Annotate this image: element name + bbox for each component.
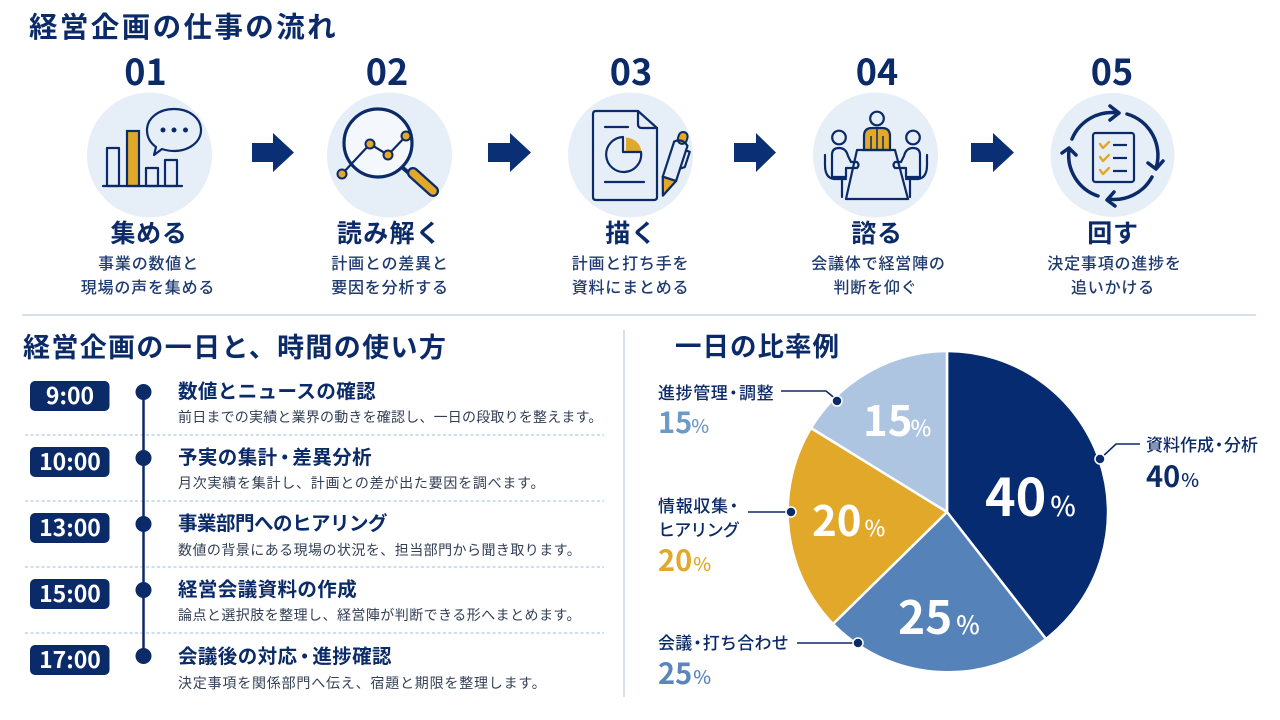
value 40%: 40% (985, 456, 1076, 531)
step description (1047, 250, 1182, 298)
step number 02: 02 (366, 44, 408, 96)
step number 03: 03 (610, 44, 652, 96)
callout: documents and analysis 40% (1095, 431, 1258, 496)
slice 40% (947, 351, 1108, 639)
row 9:00: 数値とニュースの確認 (178, 375, 376, 404)
callout: progress management 15%: 15% (658, 400, 709, 442)
arrow 2 (488, 133, 531, 172)
row 10:00 (30, 441, 545, 493)
step heading: 諮る (851, 214, 903, 250)
step description: 計画と打ち手を (572, 250, 689, 274)
arrow 1 (252, 133, 294, 172)
callout: information gathering 20%: ヒアリング (658, 516, 740, 541)
step description: 事業の数値と (98, 250, 199, 274)
row 15:00: 経営会議資料の作成 (178, 573, 357, 602)
row 17:00: 決定事項を関係部門へ伝え、宿題と期限を整理します。 (178, 673, 547, 693)
row 13:00: 事業部門へのヒアリング (178, 507, 388, 536)
callout: progress management 15% (658, 379, 842, 442)
step 02: analyze (327, 44, 452, 298)
icon: document and pen (568, 92, 695, 218)
callout: information gathering 20% (658, 492, 796, 580)
icon: magnifier and line chart (327, 92, 452, 218)
step description (81, 250, 215, 298)
step 01: collect (81, 44, 215, 298)
row 13:00: 数値の背景にある現場の状況を、担当部門から聞き取ります。 (178, 540, 581, 560)
row 17:00: 会議後の対応・進捗確認 (178, 640, 392, 669)
step description: 要因を分析する (331, 274, 449, 298)
title: 経営企画の仕事の流れ (29, 5, 338, 46)
step heading: 集める (110, 214, 188, 250)
step 03: draw (568, 44, 695, 298)
icon: meeting table with people (813, 92, 938, 218)
section heading: daily ratio: 一日の比率例 (675, 325, 840, 364)
slice 15% (811, 351, 947, 512)
icon: bar chart and speech bubble (87, 92, 212, 218)
row 10:00: 月次実績を集計し、計画との差が出た要因を調べます。 (178, 473, 545, 493)
step description: 会議体で経営陣の (811, 250, 946, 274)
step description: 決定事項の進捗を (1047, 250, 1182, 274)
callout: meetings 25%: 25% (658, 651, 711, 693)
step description: 追いかける (1071, 274, 1155, 298)
step description: 現場の声を集める (81, 274, 215, 298)
callout: meetings 25%: 会議・打ち合わせ (658, 629, 789, 654)
step description: 判断を仰ぐ (833, 274, 918, 298)
callout: meetings 25% (658, 629, 863, 693)
step number 05: 05 (1091, 44, 1133, 96)
step number 04: 04 (856, 44, 898, 96)
row 17:00 (30, 640, 547, 693)
arrow 3 (734, 133, 776, 172)
step description (811, 250, 946, 298)
section heading: daily schedule: 経営企画の一日と、時間の使い方 (23, 326, 447, 365)
step description: 資料にまとめる (572, 274, 689, 298)
callout: documents and analysis 40%: 資料作成・分析 (1146, 431, 1258, 456)
row 10:00: 予実の集計・差異分析 (178, 441, 372, 470)
step heading: 描く (605, 214, 657, 250)
row 15:00: 15:00 (39, 575, 101, 609)
step description (331, 250, 449, 298)
value 20%: 20% (812, 488, 885, 549)
step 05: follow up (1047, 44, 1182, 298)
row 9:00: 前日までの実績と業界の動きを確認し、一日の段取りを整えます。 (178, 407, 603, 427)
step number 01: 01 (124, 44, 167, 96)
step description: 計画との差異と (331, 250, 449, 274)
row 9:00 (30, 375, 603, 427)
row 13:00: 13:00 (39, 509, 101, 543)
step description (572, 250, 689, 298)
step heading: 回す (1087, 214, 1139, 250)
arrow 4 (971, 133, 1014, 172)
callout: progress management 15%: 進捗管理・調整 (658, 379, 774, 404)
row 13:00 (30, 507, 581, 560)
timeline (30, 375, 603, 693)
slice 25% (833, 512, 1046, 672)
value 15%: 15% (863, 388, 931, 449)
row 15:00: 論点と選択肢を整理し、経営陣が判断できる形へまとめます。 (178, 605, 581, 625)
callout: documents and analysis 40%: 40% (1146, 454, 1199, 496)
row 9:00: 9:00 (46, 377, 94, 411)
callout: information gathering 20%: 20% (658, 538, 711, 580)
step heading: 読み解く (337, 214, 442, 250)
slice 20% (788, 428, 947, 624)
value 25%: 25% (898, 582, 980, 648)
row 10:00: 10:00 (39, 443, 101, 477)
row 17:00: 17:00 (39, 641, 101, 675)
icon: cycle arrows and checklist (1050, 93, 1174, 217)
callout: information gathering 20%: 情報収集・ (658, 492, 743, 517)
pie chart (788, 351, 1108, 672)
step 04: consult (811, 44, 946, 298)
row 15:00 (30, 573, 581, 625)
